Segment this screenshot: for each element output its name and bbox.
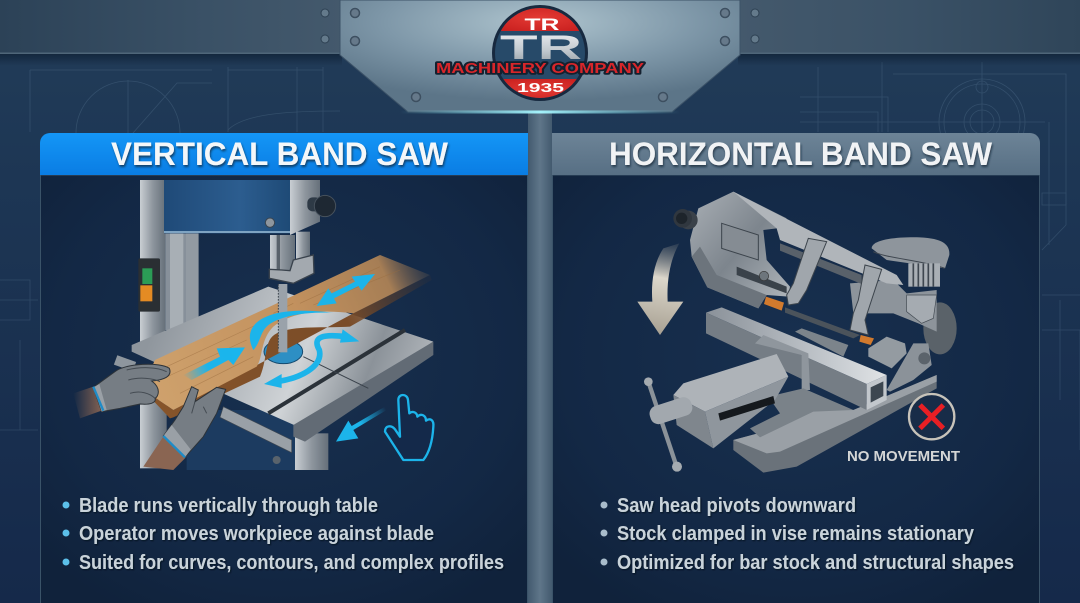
vise body — [673, 335, 853, 448]
plate rivets — [350, 8, 730, 102]
horizontal heading bar — [552, 133, 1040, 175]
pivot bracket — [868, 337, 932, 392]
arrow: feed — [183, 347, 245, 380]
saw guide arms — [787, 238, 882, 335]
bullet 1: Saw head pivots downward — [617, 495, 856, 517]
arrow: curve around blade — [250, 311, 333, 350]
arrow: head pivots downward — [637, 243, 683, 335]
right glove — [143, 387, 226, 470]
saw head casting — [690, 192, 903, 308]
top steel bar: left — [0, 0, 342, 66]
left glove — [73, 364, 170, 418]
bullet list: horizontal — [600, 495, 1014, 574]
blueprint line pattern — [0, 62, 1080, 450]
blade — [278, 284, 287, 352]
arrow: double headed — [317, 274, 375, 306]
panel: horizontal band saw — [552, 133, 1040, 603]
bullet 2: Operator moves workpiece against blade — [79, 523, 434, 545]
bullet 1: Blade runs vertically through table — [79, 495, 378, 517]
bullet list: vertical — [62, 495, 504, 574]
stock — [706, 307, 887, 410]
center steel plate — [340, 0, 740, 112]
base — [733, 375, 937, 473]
wood grain — [160, 267, 400, 393]
head knob — [673, 209, 698, 229]
logo large TR: TR — [500, 29, 582, 67]
heading: horizontal band saw: HORIZONTAL BAND SAW — [609, 136, 993, 172]
bullet dots — [62, 502, 70, 566]
knob — [307, 195, 336, 217]
blade guide post — [269, 232, 314, 283]
vertical heading bar — [40, 133, 528, 175]
center pillar — [528, 112, 552, 603]
arrow: table direction — [336, 407, 387, 442]
vise screw handle — [644, 377, 694, 472]
lower column — [187, 410, 298, 470]
logo: TR Machinery Company 1935 — [436, 5, 644, 101]
bullet 2: Stock clamped in vise remains stationary — [617, 523, 975, 545]
motor and pulley — [850, 237, 957, 354]
no movement label: NO MOVEMENT — [847, 448, 960, 465]
bullet dots — [600, 502, 608, 566]
bullet 3: Optimized for bar stock and structural shapes — [617, 552, 1014, 574]
blade and orange guides — [764, 297, 874, 345]
wood workpiece — [142, 255, 432, 418]
no movement badge — [909, 394, 954, 439]
illustration: horizontal band saw — [637, 192, 957, 473]
table — [114, 287, 433, 453]
logo small TR: TR — [524, 15, 560, 34]
blue saw head — [164, 180, 291, 233]
throat plate — [264, 340, 303, 364]
control box — [138, 258, 160, 312]
logo year: 1935 — [517, 80, 564, 95]
plate glow line — [400, 110, 680, 114]
logo banner text: MACHINERY COMPANY — [436, 61, 644, 77]
icon: pointing hand — [385, 395, 433, 460]
illustration: vertical band saw — [73, 180, 433, 470]
top steel bar: right — [738, 0, 1080, 66]
heading: vertical band saw: VERTICAL BAND SAW — [111, 136, 449, 172]
column and rails — [140, 180, 165, 347]
panel: vertical band saw — [40, 133, 528, 603]
bullet 3: Suited for curves, contours, and complex profiles — [79, 552, 504, 574]
arrow: s-curve — [277, 336, 345, 382]
rear vise jaw — [795, 328, 848, 357]
